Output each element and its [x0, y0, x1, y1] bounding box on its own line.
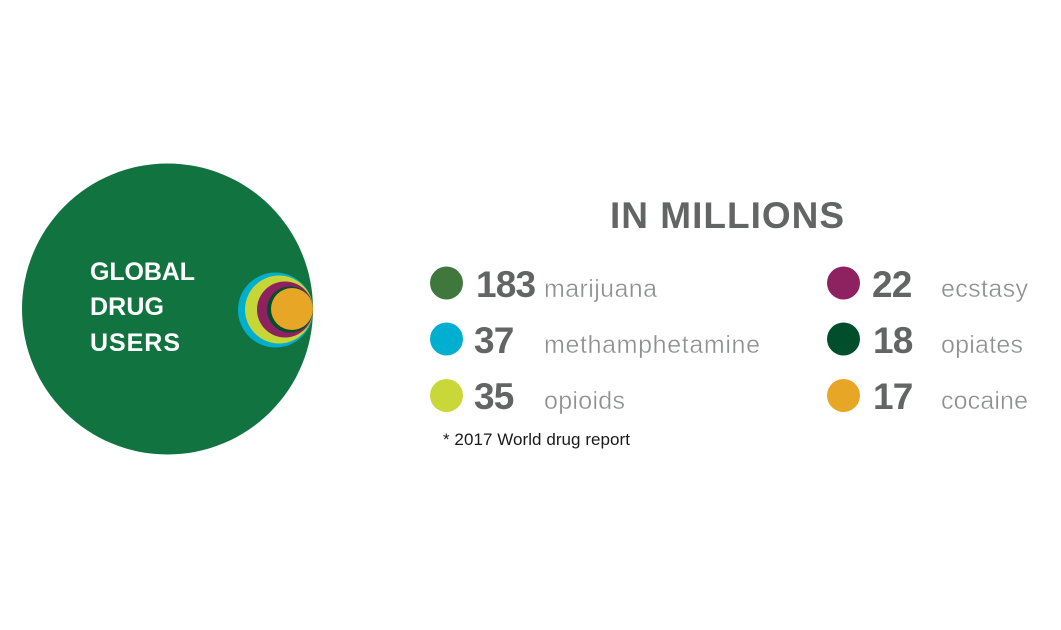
legend row: ecstasy: ecstasy — [941, 275, 1028, 303]
legend row: cocaine — [827, 376, 1028, 417]
chart label: DRUG — [90, 293, 164, 321]
legend row: ecstasy: 22 — [872, 264, 912, 305]
legend row: marijuana: marijuana — [544, 275, 657, 303]
legend row: opioids — [430, 376, 625, 417]
legend row: opiates: opiates — [941, 331, 1023, 359]
source note: * 2017 World drug report — [443, 430, 630, 449]
circle: cocaine — [271, 288, 313, 330]
legend row: opioids: opioids — [544, 387, 625, 415]
legend row: methamphetamine — [430, 320, 760, 361]
legend row: opioids: 35 — [474, 376, 514, 417]
chart label: GLOBAL — [90, 258, 195, 286]
legend row: opiates: 18 — [873, 320, 913, 361]
chart label: USERS — [90, 329, 180, 357]
legend row: methamphetamine: 37 — [474, 320, 514, 361]
circle: ecstasy — [257, 282, 313, 338]
legend row: marijuana: 183 — [476, 264, 536, 305]
nested circle chart: global drug users — [22, 164, 313, 454]
circle: opiates — [267, 286, 313, 332]
circle: methamphetamine — [238, 272, 313, 348]
legend row: methamphetamine: methamphetamine — [544, 331, 760, 359]
circle: marijuana (all users) — [22, 164, 313, 454]
legend row: opiates — [827, 320, 1023, 361]
legend row: cocaine: cocaine — [941, 387, 1028, 415]
legend row: cocaine: 17 — [873, 376, 913, 417]
circle: opioids — [245, 276, 313, 344]
heading: IN MILLIONS — [610, 195, 845, 236]
legend row: ecstasy — [827, 264, 1028, 305]
legend row: marijuana — [430, 264, 657, 305]
chart label — [90, 258, 195, 357]
